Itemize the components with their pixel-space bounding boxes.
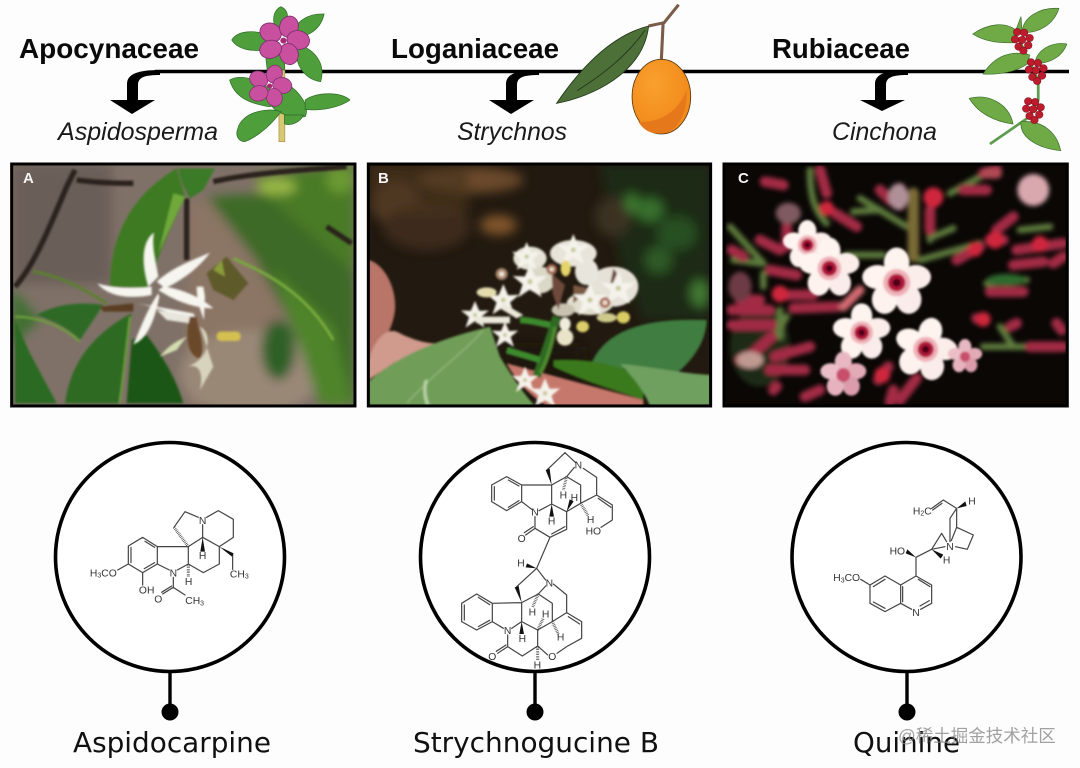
chemical structure: Strychnogucine B: O (548, 652, 556, 663)
chemical structure: Quinine: C (924, 506, 932, 517)
chemical structure: Aspidocarpine: CH (230, 569, 245, 580)
chemical structure: Aspidocarpine: H (199, 551, 206, 562)
chemical structure: Strychnogucine B: HO (586, 526, 601, 537)
chemical structure: Aspidocarpine: N (170, 568, 177, 579)
panel C: Cinchona flower photo (724, 164, 1067, 406)
chemical structure: Aspidocarpine (90, 511, 249, 607)
chemical structure: Quinine: N (946, 542, 954, 553)
timeline line with three family branches (110, 70, 1069, 114)
chemical structure: Aspidocarpine: N (199, 516, 206, 527)
chemical structure: Aspidocarpine: 3 (97, 573, 101, 580)
arrow: Apocynaceae to Aspidosperma (110, 70, 160, 114)
chemical structure: Strychnogucine B: O (518, 534, 526, 545)
chemical structure: Quinine: HO (890, 546, 905, 557)
chemical structure: Quinine: CO (845, 573, 860, 584)
genus: Strychnos: Strychnos (457, 118, 567, 146)
chemical structure: Quinine: H (913, 506, 920, 517)
chemical structure: Strychnogucine B: H (557, 632, 564, 643)
letter A: A (23, 170, 34, 187)
compound name: Aspidocarpine: Aspidocarpine (73, 726, 271, 759)
compound name: Quinine: Quinine (853, 726, 960, 759)
chemical structure: Quinine: 3 (841, 577, 845, 584)
genus: Cinchona: Cinchona (832, 118, 937, 146)
panel A: Aspidosperma flower photo (12, 163, 355, 417)
connector and dot (526, 672, 544, 720)
chemical structure: Quinine: 2 (920, 511, 924, 518)
chemical structure: Strychnogucine B: H (542, 610, 549, 621)
watermark: @稀土掘金技术社区 (898, 726, 1056, 746)
letter B: B (378, 170, 389, 187)
icon: periwinkle plant with pink flowers (230, 7, 350, 142)
heading: Loganiaceae: Loganiaceae (391, 33, 559, 64)
chemical structure: Aspidocarpine: CO (101, 568, 117, 579)
letter C: C (738, 170, 749, 187)
compound circle: Aspidocarpine (56, 442, 284, 720)
chemical structure: Strychnogucine B: N (575, 461, 582, 472)
chemical structure: Strychnogucine B: H (571, 493, 578, 504)
chemical structure: Strychnogucine B: O (488, 652, 496, 663)
chemical structure: Aspidocarpine: 3 (245, 574, 249, 581)
chemical structure: Strychnogucine B: H (587, 515, 594, 526)
compound name: Strychnogucine B: Strychnogucine B (413, 726, 659, 759)
chemical structure: Strychnogucine B: H (560, 490, 567, 501)
heading: Apocynaceae: Apocynaceae (19, 33, 199, 64)
chemical structure: Quinine (833, 496, 976, 619)
chemical structure: Aspidocarpine: OH (139, 586, 154, 597)
chemical structure: Aspidocarpine: H (185, 577, 192, 588)
icon: Strychnos fruit and leaf (557, 5, 691, 134)
chemical structure: Strychnogucine B (462, 453, 612, 672)
chemical structure: Aspidocarpine: CH (185, 596, 200, 607)
arrow: Loganiaceae to Strychnos (489, 70, 539, 114)
chemical structure: Quinine: N (912, 608, 920, 619)
chemical structure: Aspidocarpine: H (90, 568, 97, 579)
compound circle: Strychnogucine B (420, 442, 650, 720)
chemical structure: Quinine: H (833, 573, 841, 584)
panel B: Strychnos flower photo (368, 164, 711, 407)
connector and dot (898, 672, 916, 720)
chemical structure: Aspidocarpine: O (154, 595, 162, 606)
chemical structure: Strychnogucine B: H (529, 607, 536, 618)
compound circle: Quinine (792, 442, 1021, 720)
chemical structure: Aspidocarpine: 3 (200, 600, 204, 607)
chemical structure: Strychnogucine B: H (548, 517, 555, 528)
arrow: Rubiaceae to Cinchona (860, 70, 908, 111)
chemical structure: Strychnogucine B: N (531, 507, 539, 518)
chemical structure: Strychnogucine B: H (534, 661, 541, 672)
chemical structure: Strychnogucine B: N (546, 579, 553, 590)
genus: Aspidosperma: Aspidosperma (56, 118, 218, 146)
chemical structure: Strychnogucine B: H (517, 558, 525, 569)
chemical structure: Strychnogucine B: N (504, 626, 511, 637)
chemical structure: Quinine: H (943, 556, 950, 567)
connector and dot (162, 672, 178, 720)
chemical structure: Quinine: H (968, 496, 976, 507)
icon: Cinchona branch with red berries (969, 8, 1067, 151)
heading: Rubiaceae: Rubiaceae (772, 33, 910, 64)
chemical structure: Strychnogucine B: H (519, 634, 526, 645)
